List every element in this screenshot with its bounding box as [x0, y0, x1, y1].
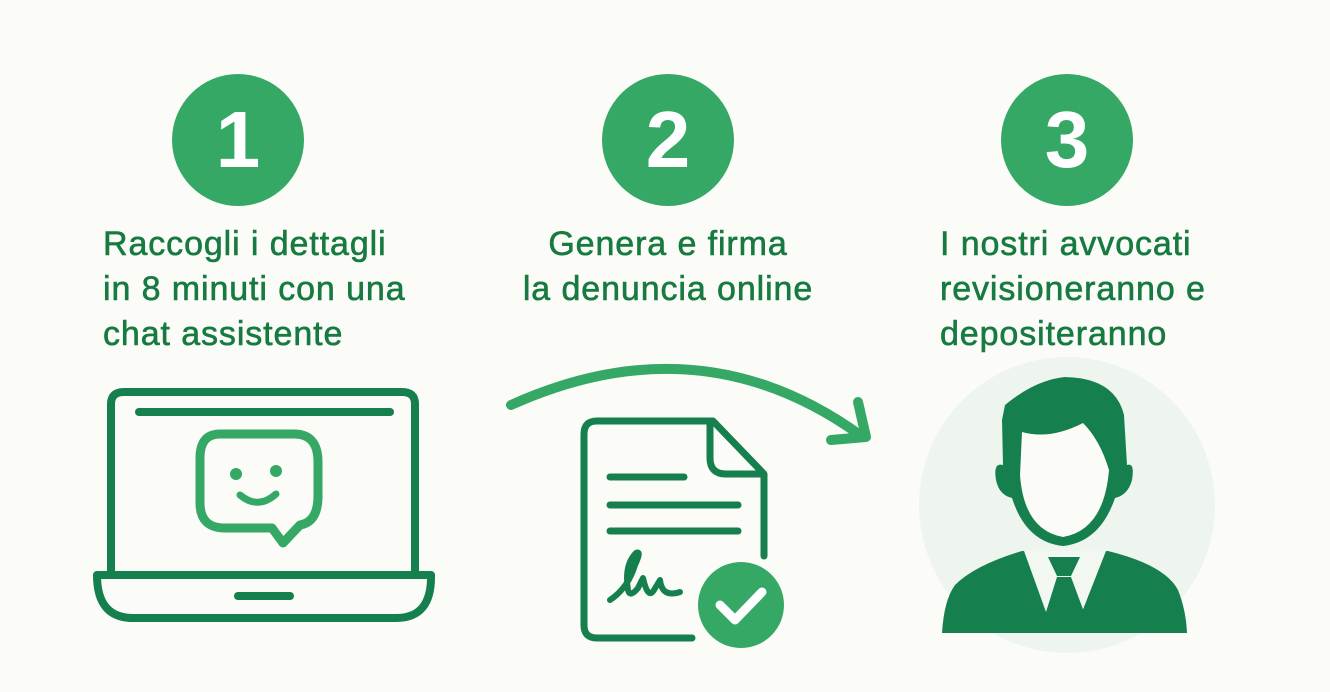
step 2 number: 2	[646, 95, 690, 184]
step 2 number	[602, 74, 734, 206]
step 2 text	[523, 225, 813, 308]
step 1 number	[172, 74, 304, 206]
arrow	[511, 369, 866, 440]
step 1 number: 1	[216, 95, 260, 184]
icon: lawyer avatar	[919, 357, 1215, 653]
icon: document with signature	[584, 421, 784, 648]
step 3 number	[1001, 74, 1133, 206]
icon: laptop with chat	[97, 392, 431, 618]
step 3 text: I nostri avvocati	[940, 225, 1192, 263]
step 1 text: chat assistente	[103, 315, 343, 353]
step 1 text: Raccogli i dettagli	[103, 225, 387, 263]
step 3 text: depositeranno	[940, 315, 1167, 353]
step 3 number: 3	[1045, 95, 1089, 184]
step 2 text: Genera e firma	[548, 225, 788, 263]
step 2 text: la denuncia online	[523, 270, 813, 308]
step 3 text: revisioneranno e	[940, 270, 1206, 308]
step 3 text	[940, 225, 1206, 353]
step 1 text: in 8 minuti con una	[103, 270, 406, 308]
step 1 text	[103, 225, 406, 353]
